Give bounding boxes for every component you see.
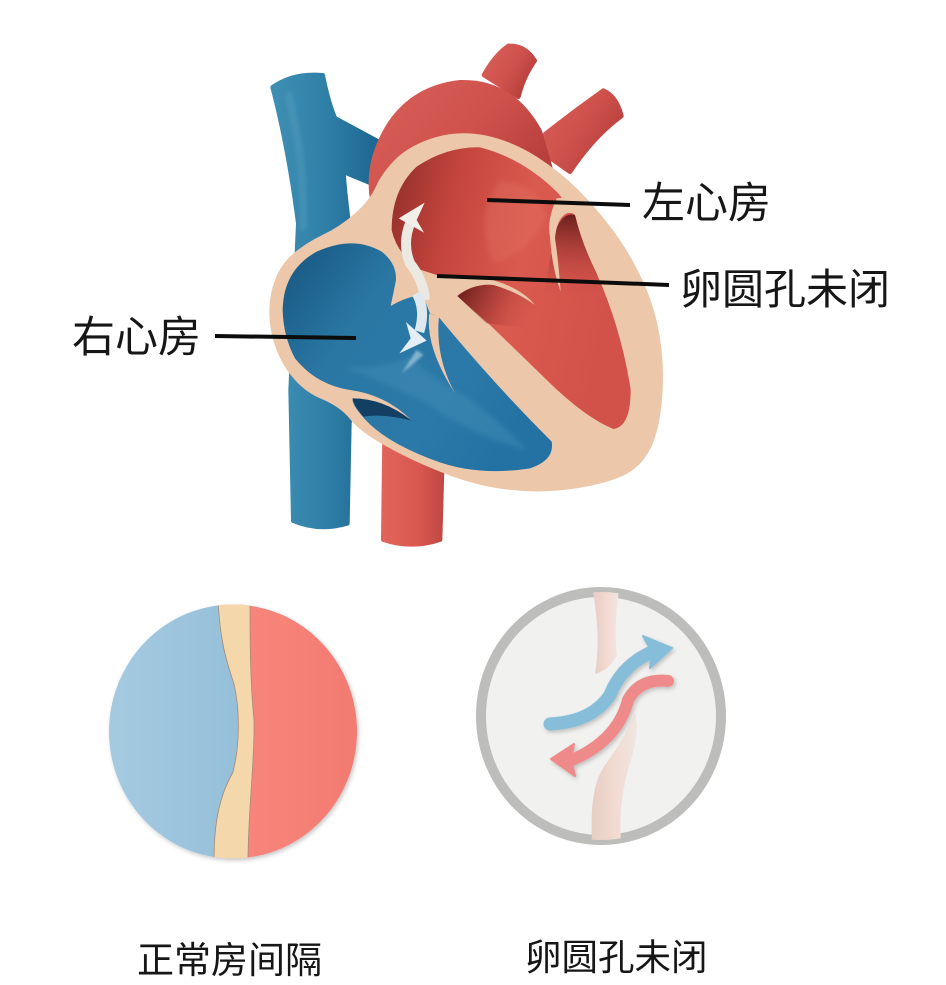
upper artery branch: [484, 46, 535, 97]
right artery branch: [532, 91, 621, 172]
right chamber highlight: [343, 357, 527, 450]
gray ring and background: [481, 592, 721, 840]
lower left pocket: [457, 285, 540, 330]
blue arrow: [550, 636, 672, 724]
shunt arrow through foramen: [399, 203, 427, 353]
label: left atrium: 左心房: [642, 180, 771, 228]
beige septum: [214, 600, 254, 862]
heart wall: [269, 133, 663, 491]
descending aorta: [383, 430, 443, 545]
label: patent foramen ovale: 卵圆孔未闭: [680, 266, 890, 313]
right chamber (blue): [283, 243, 552, 471]
circle: normal atrial septum: [100, 600, 365, 865]
caption: patent foramen ovale: 卵圆孔未闭: [525, 937, 708, 978]
aortic arch: [369, 80, 553, 203]
lower right pocket: [353, 398, 412, 421]
leader line: left atrium: [487, 200, 630, 205]
red arrow: [551, 681, 668, 776]
left chamber highlight: [485, 180, 547, 263]
red half: [240, 600, 365, 865]
tricuspid valve flap: [429, 313, 455, 393]
circle: patent foramen ovale: [481, 590, 721, 845]
light streak under lower arrow: [402, 350, 423, 373]
mitral valve flap and dark pocket: [543, 197, 600, 297]
left chamber (red): [392, 147, 631, 429]
septum flaps: [592, 590, 637, 845]
upper septum flap: [593, 590, 619, 674]
leader line: foramen ovale: [437, 276, 669, 285]
blue half: [100, 600, 240, 865]
heart illustration: [269, 46, 663, 545]
leader line: right atrium: [215, 336, 356, 338]
superior and inferior vena cava: [273, 75, 378, 527]
caption: normal atrial septum: 正常房间隔: [137, 940, 322, 981]
label: right atrium: 右心房: [72, 314, 201, 362]
lower septum flap: [592, 712, 637, 845]
